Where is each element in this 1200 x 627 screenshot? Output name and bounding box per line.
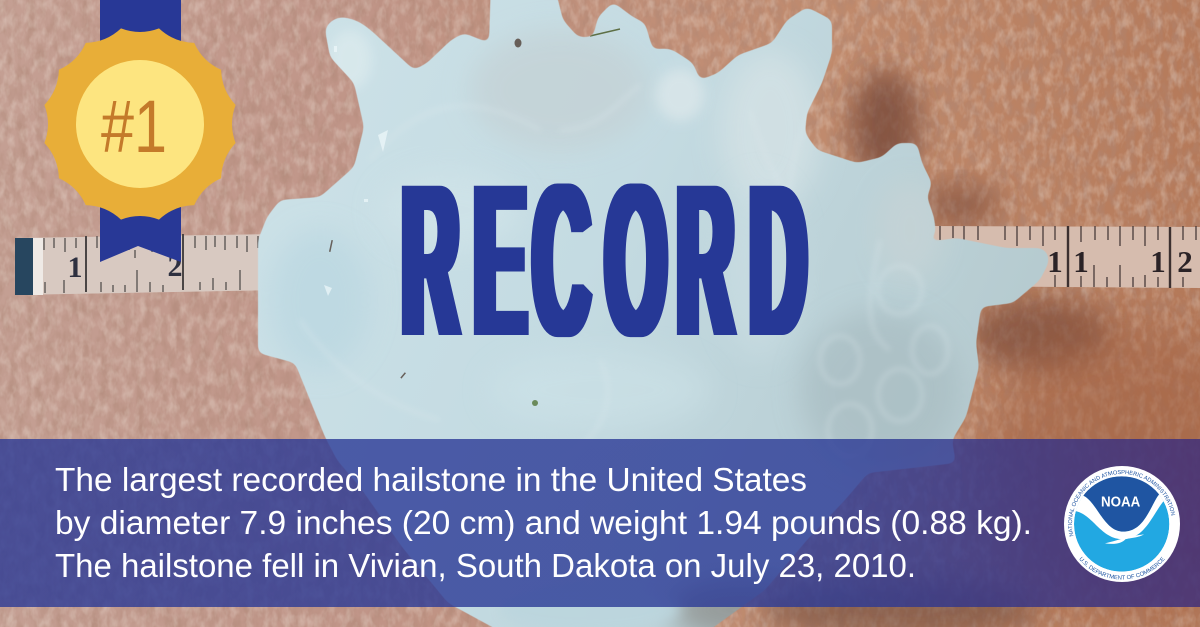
- main word RECORD: RECORD: [402, 138, 806, 382]
- measuring tape, left piece: [15, 234, 280, 295]
- NOAA logo: U.S. DEPARTMENT OF COMMERCE: [1080, 556, 1165, 580]
- measuring tape, right piece: 1: [1047, 244, 1063, 279]
- measuring tape, right piece: [930, 226, 1200, 288]
- caption text: by diameter 7.9 inches (20 cm) and weight 1.94 pounds (0.88 kg).: [55, 504, 1032, 541]
- measuring tape, left piece: 2: [168, 250, 182, 283]
- hailstone: [250, 0, 1060, 627]
- NOAA logo: [1064, 466, 1180, 582]
- measuring tape, right piece: 2: [1177, 244, 1193, 279]
- NOAA logo: NATIONAL OCEANIC AND ATMOSPHERIC ADMINISTRATION: [1068, 470, 1176, 536]
- caption text: The hailstone fell in Vivian, South Dakota on July 23, 2010.: [55, 547, 916, 584]
- measuring tape, right piece: 1: [1150, 244, 1166, 279]
- caption text: [55, 461, 1032, 584]
- medal badge: [44, 28, 236, 220]
- caption text: The largest recorded hailstone in the United States: [55, 461, 807, 498]
- ribbon: [100, 0, 181, 262]
- medal badge: #1: [101, 85, 167, 168]
- measuring tape, left piece: 1: [68, 251, 82, 284]
- measuring tape, right piece: 1: [1073, 244, 1089, 279]
- NOAA logo: NOAA: [1101, 495, 1141, 511]
- caption banner: [0, 439, 1200, 607]
